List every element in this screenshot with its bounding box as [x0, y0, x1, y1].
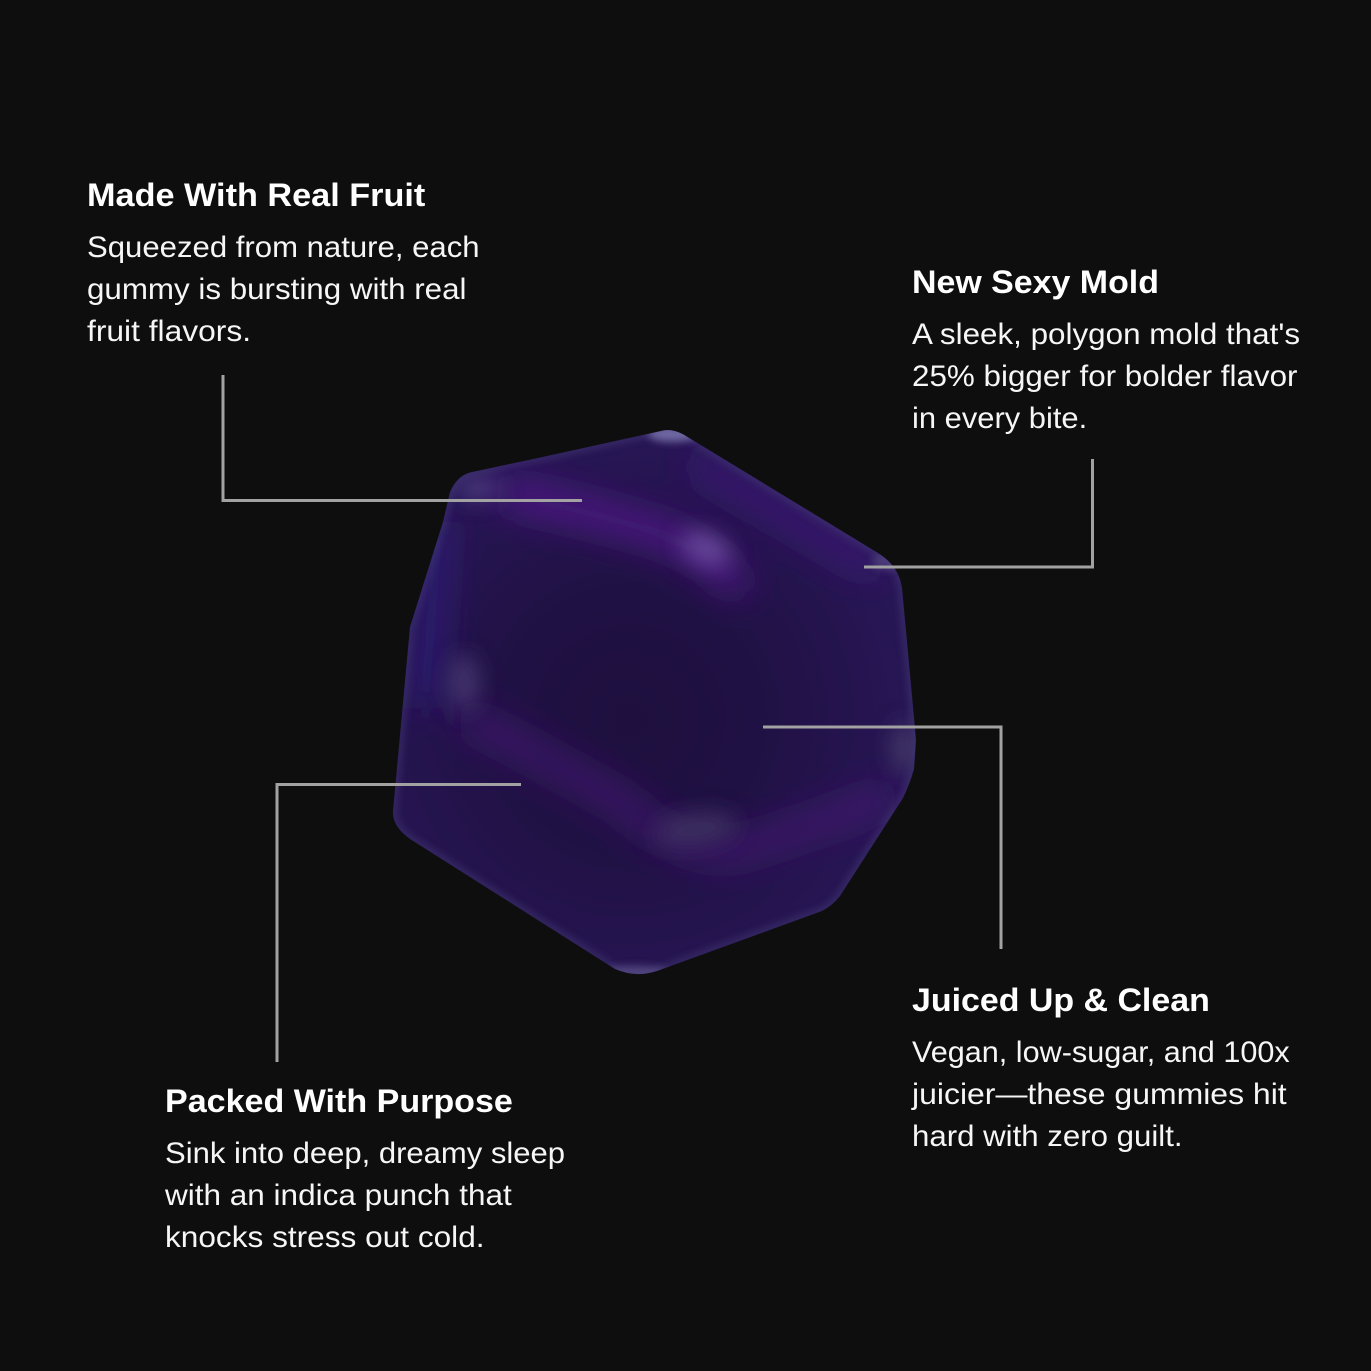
text block: New Sexy Mold: A sleek, polygon mold that's — [912, 318, 1300, 351]
text block: Packed With Purpose: with an indica punch that — [165, 1179, 512, 1212]
text block: New Sexy Mold: New Sexy Mold — [912, 264, 1159, 300]
text block: Made With Real Fruit: gummy is bursting with real — [87, 273, 466, 306]
text block: Juiced Up & Clean: Vegan, low-sugar, and 100x — [912, 1036, 1290, 1069]
text block: New Sexy Mold: in every bite. — [912, 402, 1087, 435]
text block: Packed With Purpose: Sink into deep, dreamy sleep — [165, 1137, 565, 1170]
text block: Packed With Purpose: knocks stress out cold. — [165, 1221, 485, 1254]
text block: Packed With Purpose — [165, 1083, 565, 1254]
text block: Made With Real Fruit: fruit flavors. — [87, 315, 251, 348]
text block: Made With Real Fruit: Squeezed from nature, each — [87, 231, 480, 264]
gummy rim glow — [393, 430, 916, 974]
text block: Made With Real Fruit: Made With Real Fruit — [87, 177, 425, 213]
illustration: purple polygon gummy — [392, 430, 916, 974]
text block: Juiced Up & Clean: Juiced Up & Clean — [912, 982, 1210, 1018]
text block: Packed With Purpose: Packed With Purpose — [165, 1083, 513, 1119]
text block: Juiced Up & Clean: hard with zero guilt. — [912, 1120, 1183, 1153]
text block: Juiced Up & Clean — [911, 982, 1290, 1153]
text block: Juiced Up & Clean: juicier—these gummies hit — [912, 1078, 1287, 1111]
text block: Made With Real Fruit — [87, 177, 480, 348]
text block: New Sexy Mold: 25% bigger for bolder flavor — [912, 360, 1298, 393]
text block: New Sexy Mold — [912, 264, 1300, 435]
